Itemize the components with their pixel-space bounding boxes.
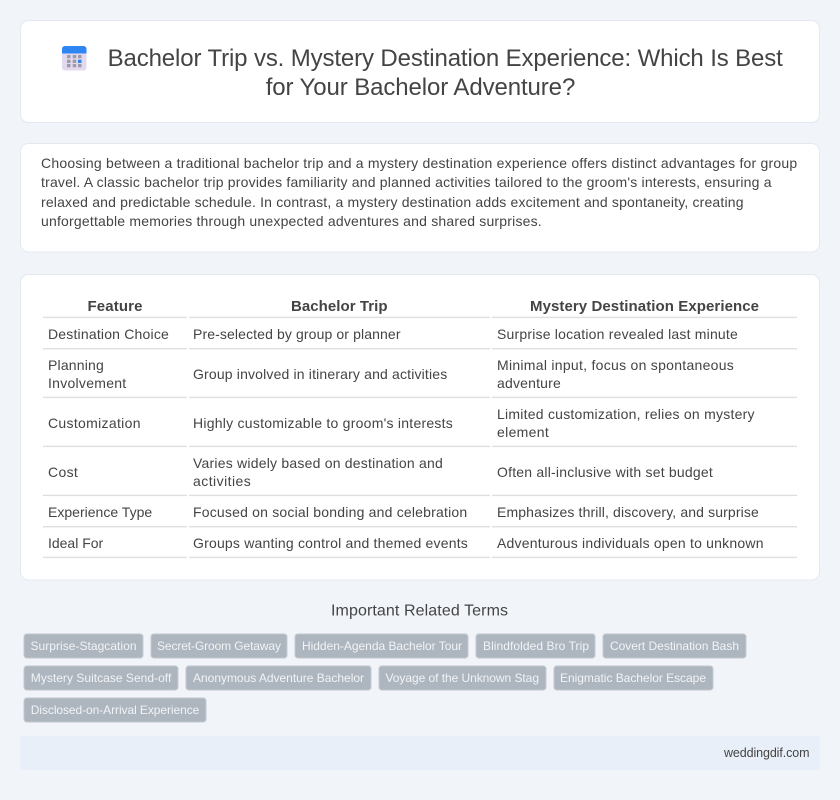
row: planning involvement: Planning xyxy=(48,357,104,373)
related terms tags: Covert Destination Bash xyxy=(610,639,739,653)
related terms tags: Hidden-Agenda Bachelor Tour xyxy=(302,639,462,653)
icon: calendar xyxy=(62,46,86,70)
related terms tags: Surprise-Stagcation xyxy=(30,639,136,653)
row: destination choice: Destination Choice xyxy=(48,326,169,342)
row: cost: Cost xyxy=(48,464,78,480)
related terms tags: Voyage of the Unknown Stag xyxy=(386,671,539,685)
header panel xyxy=(20,20,820,122)
related terms tags: Secret-Groom Getaway xyxy=(157,639,281,653)
title: Bachelor Trip vs. Mystery Destination Experience: Which Is Best xyxy=(108,45,783,72)
row: experience type: Focused on social bonding and celebration xyxy=(193,504,467,520)
row: destination choice: Surprise location revealed last minute xyxy=(497,326,738,342)
row: customization: Highly customizable to groom's interests xyxy=(193,415,453,431)
related terms tags: Mystery Suitcase Send-off xyxy=(31,671,172,685)
row: experience type: Experience Type xyxy=(48,504,152,520)
row: experience type xyxy=(48,504,759,520)
row: customization: Limited customization, relies on mystery xyxy=(497,406,754,422)
row: planning involvement: adventure xyxy=(497,375,561,391)
related terms tags xyxy=(24,634,746,722)
row: ideal for: Groups wanting control and themed events xyxy=(193,535,468,551)
intro panel xyxy=(20,144,820,252)
row: experience type: Emphasizes thrill, discovery, and surprise xyxy=(497,504,759,520)
intro text: unforgettable memories through unexpected adventures and shared surprises. xyxy=(41,213,542,229)
row: ideal for: Adventurous individuals open to unknown xyxy=(497,535,764,551)
footer source: weddingdif.com xyxy=(723,746,810,760)
table header xyxy=(88,298,759,315)
intro text xyxy=(41,155,797,229)
row: cost: activities xyxy=(193,473,251,489)
row: customization: Customization xyxy=(48,415,140,431)
row: planning involvement xyxy=(48,357,734,391)
related terms tags: Disclosed-on-Arrival Experience xyxy=(31,703,200,717)
row: ideal for: Ideal For xyxy=(48,535,104,551)
row: cost: Often all-inclusive with set budget xyxy=(497,464,713,480)
row: customization: element xyxy=(497,424,549,440)
intro text: relaxed and predictable schedule. In contrast, a mystery destination adds excitement and spontaneity, creating xyxy=(41,194,744,210)
table header: Mystery Destination Experience xyxy=(530,298,759,315)
row: planning involvement: Minimal input, focus on spontaneous xyxy=(497,357,734,373)
title xyxy=(108,45,783,101)
row: ideal for xyxy=(48,535,764,551)
row: planning involvement: Group involved in itinerary and activities xyxy=(193,366,447,382)
related terms tags: Blindfolded Bro Trip xyxy=(483,639,589,653)
row: cost xyxy=(48,455,713,489)
table header: Bachelor Trip xyxy=(291,298,388,315)
comparison table panel xyxy=(20,274,820,580)
row: planning involvement: Involvement xyxy=(48,375,126,391)
related terms tags: Enigmatic Bachelor Escape xyxy=(560,671,706,685)
intro text: travel. A classic bachelor trip provides familiarity and planned activities tailored to the groom's interests, ensuring a xyxy=(41,174,772,190)
intro text: Choosing between a traditional bachelor trip and a mystery destination experience offers distinct advantages for group xyxy=(41,155,797,171)
table header: Feature xyxy=(88,298,142,315)
footer bar xyxy=(20,736,820,770)
related terms heading: Important Related Terms xyxy=(331,602,508,620)
row: customization xyxy=(48,406,754,440)
row: destination choice: Pre-selected by group or planner xyxy=(193,326,401,342)
row: destination choice xyxy=(48,326,738,342)
row: cost: Varies widely based on destination and xyxy=(193,455,443,471)
related terms tags: Anonymous Adventure Bachelor xyxy=(193,671,364,685)
title: for Your Bachelor Adventure? xyxy=(266,74,575,101)
